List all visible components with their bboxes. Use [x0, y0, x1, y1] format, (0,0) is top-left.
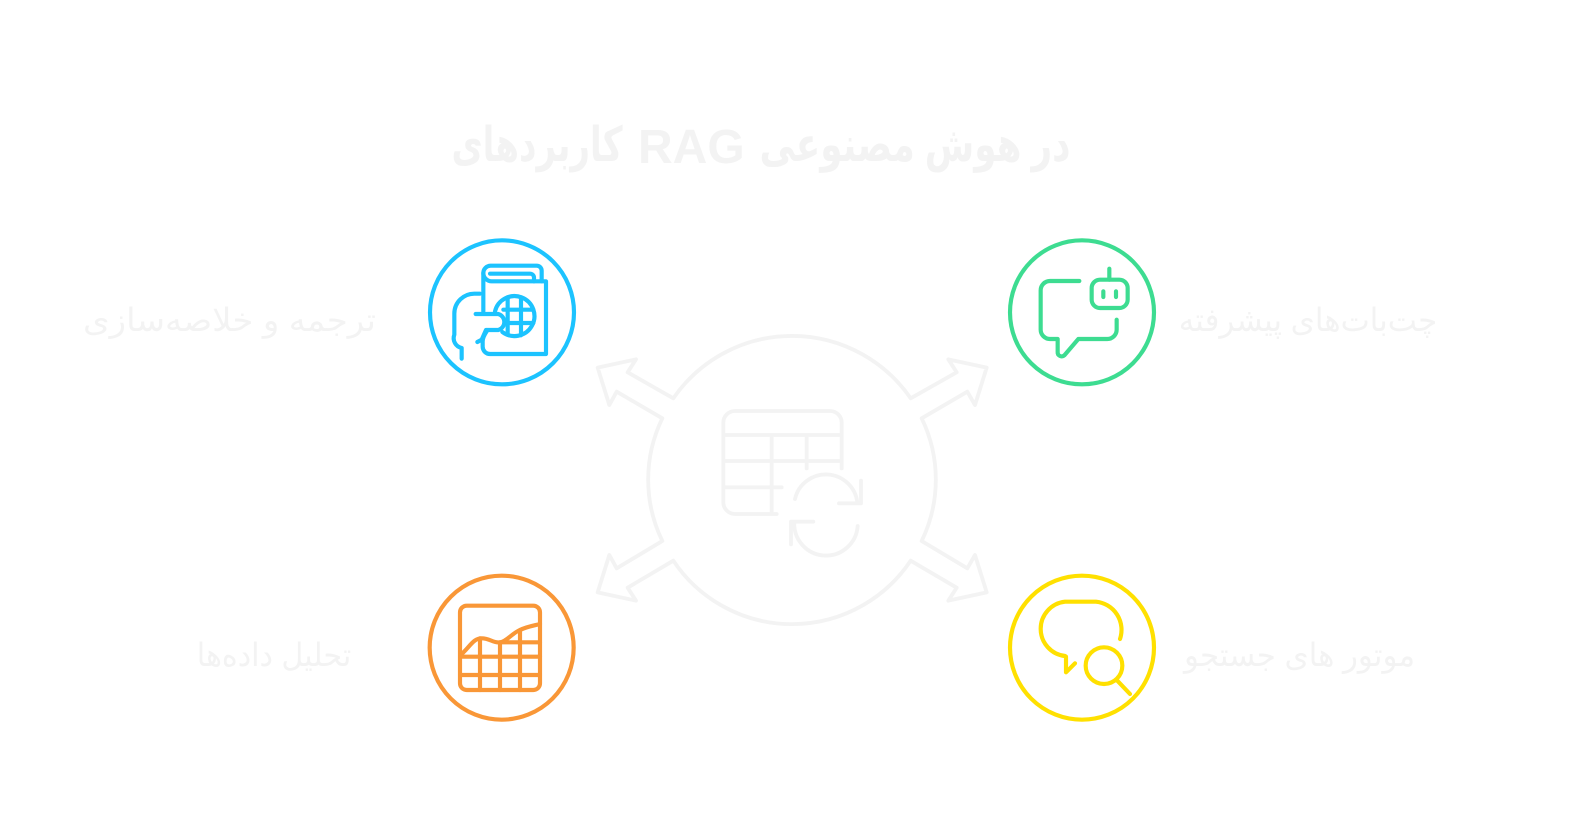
icon: chatbot — [1010, 240, 1154, 384]
icon: search engine — [1010, 576, 1154, 720]
label: data analysis: تحلیل داده‌ها — [197, 637, 351, 673]
label: search engines: موتور های جستجو — [1182, 637, 1415, 674]
hub outline arrows — [598, 336, 987, 624]
title — [452, 119, 1070, 174]
label: translation: ترجمه و خلاصه‌سازی — [83, 302, 376, 339]
icon: table with refresh — [723, 411, 861, 556]
label: chatbots: چت‌بات‌های پیشرفته — [1179, 302, 1437, 339]
icon: translation and summarization — [430, 240, 574, 384]
icon: data analysis — [430, 576, 574, 720]
title: RAG — [638, 121, 745, 174]
central hub with four arrows — [598, 336, 987, 624]
title: در هوش مصنوعی — [760, 119, 1070, 173]
title: کاربردهای — [452, 119, 623, 173]
